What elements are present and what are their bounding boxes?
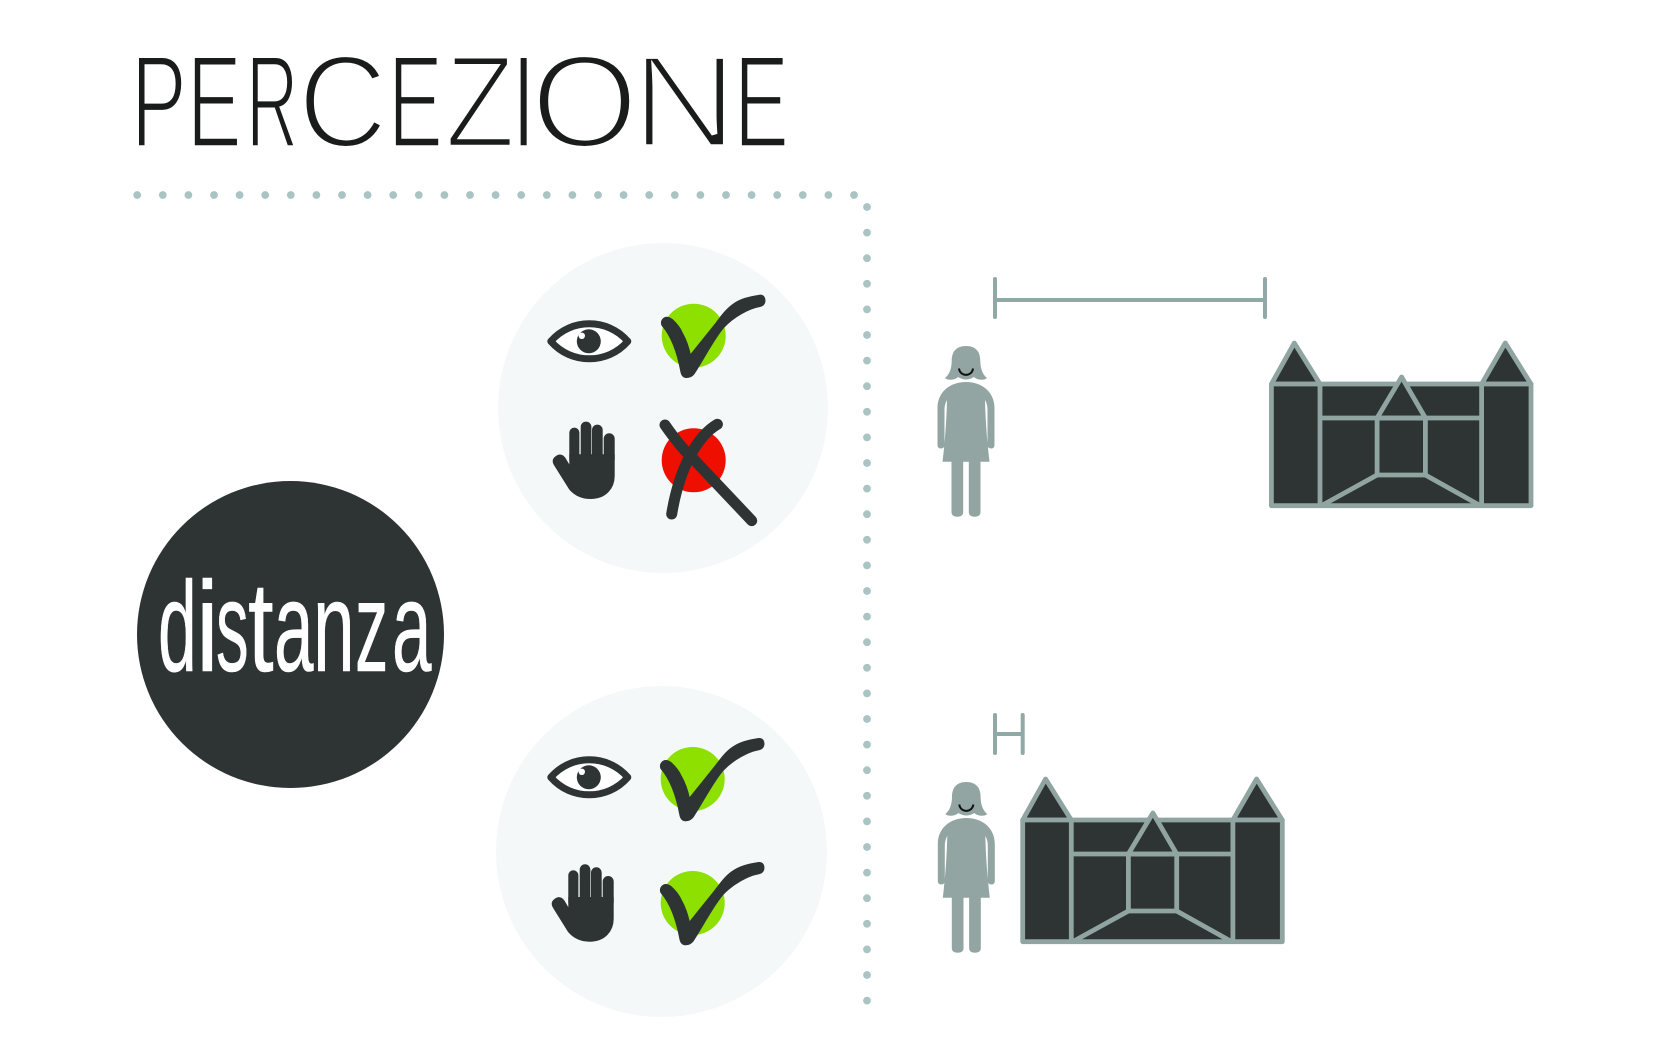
title: R	[246, 28, 299, 175]
badge: distanza: n	[313, 556, 355, 699]
badge: distanza	[137, 481, 444, 788]
badge: distanza: a	[274, 556, 313, 699]
icon: green check	[661, 739, 763, 820]
badge: distanza: s	[216, 556, 249, 699]
title: E	[734, 28, 789, 175]
title: P	[131, 28, 187, 175]
badge: distanza: z	[355, 556, 388, 699]
icon: green check	[661, 863, 763, 944]
dotted divider: horizontal	[137, 191, 855, 199]
title: E	[388, 28, 443, 175]
title: O	[531, 28, 639, 175]
illustration: castle far	[1271, 343, 1531, 506]
dotted divider: vertical	[863, 207, 871, 1002]
icon: eye	[551, 324, 628, 359]
title: Z	[445, 28, 515, 175]
icon: eye	[551, 760, 628, 795]
icon: hand	[552, 865, 613, 941]
title: N	[631, 28, 738, 175]
title: C	[298, 28, 387, 175]
distance bar: long	[995, 279, 1265, 317]
figure: person far from castle	[938, 346, 994, 517]
icon: red cross	[662, 424, 752, 521]
panel: near distance senses	[496, 686, 827, 1017]
distance bar: short	[995, 715, 1023, 753]
badge: distanza: t	[248, 556, 274, 699]
badge: distanza: a	[392, 556, 432, 699]
title: E	[187, 28, 241, 175]
title	[131, 28, 789, 175]
icon: green check	[662, 296, 764, 377]
title: I	[511, 28, 537, 175]
panel: far distance senses	[498, 243, 828, 573]
illustration: castle near	[1023, 779, 1282, 942]
badge: distanza: i	[196, 556, 219, 699]
badge: distanza: d	[158, 556, 197, 699]
icon: hand	[553, 422, 614, 498]
figure: person near castle	[938, 782, 995, 953]
